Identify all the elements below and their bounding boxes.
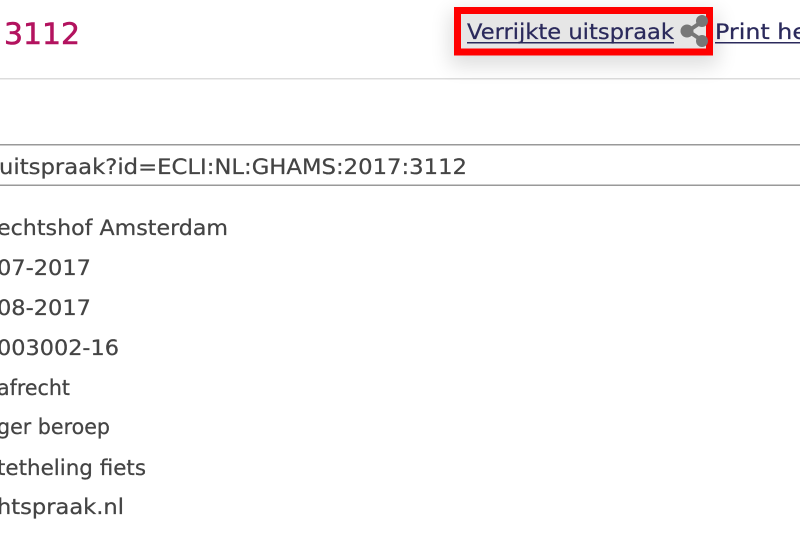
case number heading: 3112 [4, 17, 80, 51]
metadata values: tetheling fiets [0, 456, 146, 481]
print link: Print he [715, 20, 800, 45]
highlighted link: Verrijkte uitspraak: Verrijkte uitspraak [467, 20, 675, 45]
metadata values [0, 216, 228, 520]
icon: share [680, 15, 708, 47]
highlighted link: Verrijkte uitspraak [450, 10, 718, 66]
metadata values: 003002-16 [0, 336, 119, 361]
header divider [0, 78, 800, 80]
permalink box: uitspraak?id=ECLI:NL:GHAMS:2017:3112 [0, 155, 467, 180]
metadata values: ger beroep [0, 415, 110, 440]
metadata values: echtshof Amsterdam [0, 216, 228, 241]
metadata values: htspraak.nl [0, 495, 124, 520]
